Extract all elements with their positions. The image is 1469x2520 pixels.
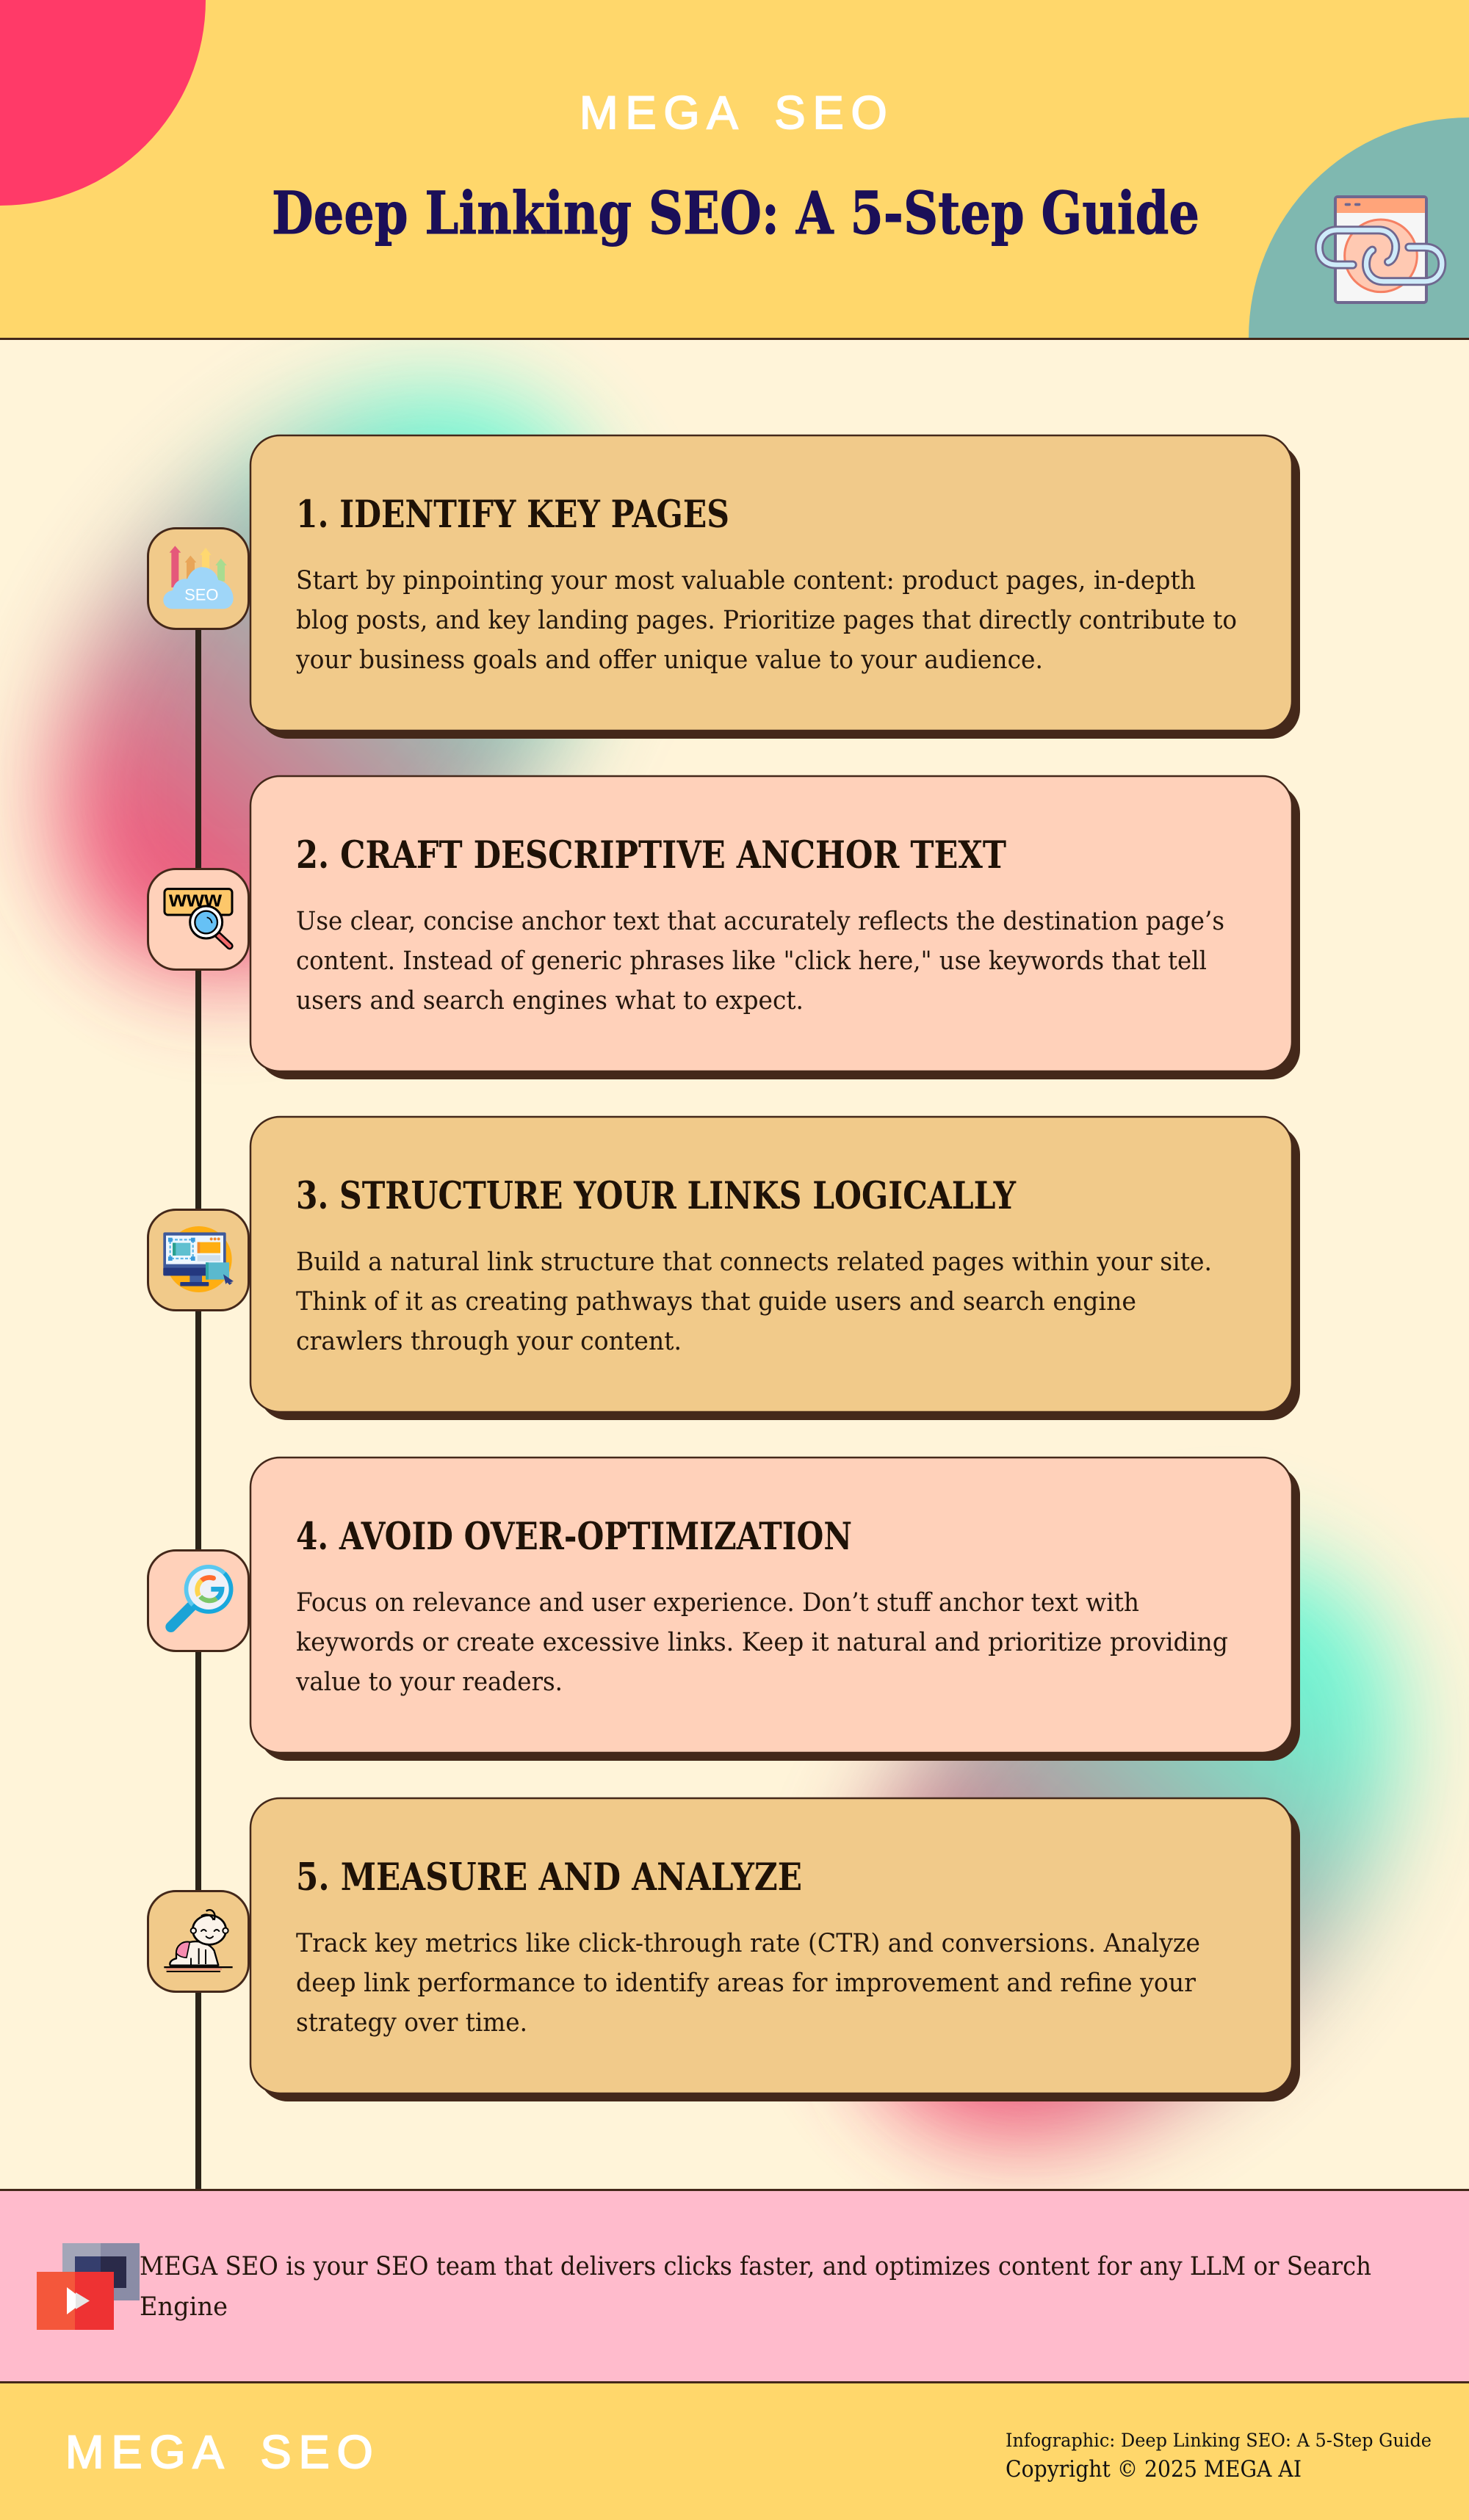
page background (0, 340, 1469, 2190)
icon: linked chain over web page (1319, 197, 1442, 303)
step 4 body: Focus on relevance and user experience. Don’t stuff anchor text with (296, 1588, 1139, 1618)
step 1 body: Start by pinpointing your most valuable content: product pages, in-depth (296, 566, 1196, 595)
background blob: upper left (0, 286, 713, 1080)
footer logo text: MEGA SEO (65, 2427, 380, 2478)
title: Deep Linking SEO: A 5-Step Guide (272, 178, 1199, 247)
panel: step 2 (250, 776, 1300, 1079)
step 2 body: users and search engines what to expect. (296, 986, 804, 1015)
step 1 body: your business goals and offer unique value to your audience. (295, 645, 1043, 675)
step 5 body: strategy over time. (296, 2008, 527, 2038)
step 5 heading: 5. MEASURE AND ANALYZE (296, 1855, 802, 1900)
step 2 body: content. Instead of generic phrases like "click here," use keywords that tell (296, 946, 1207, 976)
header panel (0, 0, 1469, 340)
step 3 body: Think of it as creating pathways that guide users and search engine (296, 1287, 1136, 1317)
icon badge: crawling baby (148, 1891, 248, 1991)
panel: footer (0, 2383, 1469, 2520)
panel: step 3 (250, 1117, 1300, 1420)
step 5 body: deep link performance to identify areas for improvement and refine your (296, 1969, 1196, 1998)
panel: step 5 (250, 1798, 1300, 2101)
step 1 body (295, 566, 1237, 675)
step 5 body (296, 1929, 1200, 2038)
icon badge: www search (148, 869, 248, 969)
timeline line (195, 527, 201, 2191)
SEO label: SEO (184, 585, 219, 604)
panel: step 4 (250, 1458, 1300, 1761)
step 4 body: keywords or create excessive links. Keep it natural and prioritize providing (296, 1628, 1228, 1657)
footer copyright: Copyright © 2025 MEGA AI (1006, 2456, 1302, 2483)
step 1 body: blog posts, and key landing pages. Prioritize pages that directly contribute to (296, 606, 1237, 635)
icon badge: Google magnifier (148, 1551, 248, 1651)
header logo text: MEGA SEO (580, 87, 895, 139)
background blob: lower right (742, 1450, 1469, 2245)
icon badge: www search: www (168, 887, 222, 912)
callout text (140, 2252, 1371, 2322)
step 2 heading: 2. CRAFT DESCRIPTIVE ANCHOR TEXT (296, 833, 1006, 877)
step 5 body: Track key metrics like click-through rate (CTR) and conversions. Analyze (296, 1929, 1200, 1958)
panel: step 1 (250, 435, 1300, 739)
footer infographic credit: Infographic: Deep Linking SEO: A 5-Step Guide (1006, 2430, 1432, 2451)
icon badge: SEO cloud (148, 529, 248, 629)
step 3 body: crawlers through your content. (296, 1327, 682, 1356)
step 4 heading: 4. AVOID OVER-OPTIMIZATION (296, 1515, 852, 1559)
step 1 heading: 1. IDENTIFY KEY PAGES (296, 493, 729, 537)
step 4 body (295, 1588, 1228, 1697)
step 2 body: Use clear, concise anchor text that accurately reflects the destination page’s (296, 907, 1224, 936)
step 3 heading: 3. STRUCTURE YOUR LINKS LOGICALLY (296, 1174, 1016, 1218)
icon badge: monitor layout (148, 1210, 248, 1310)
step 3 body: Build a natural link structure that connects related pages within your site. (296, 1248, 1212, 1277)
callout text: MEGA SEO is your SEO team that delivers clicks faster, and optimizes content for any LLM or Search (140, 2252, 1371, 2281)
icon: video play squares (37, 2243, 140, 2330)
step 2 body (296, 907, 1224, 1015)
callout text: Engine (140, 2292, 228, 2322)
step 3 body (296, 1248, 1212, 1356)
step 4 body: value to your readers. (295, 1668, 563, 1697)
panel: company callout (0, 2189, 1469, 2383)
